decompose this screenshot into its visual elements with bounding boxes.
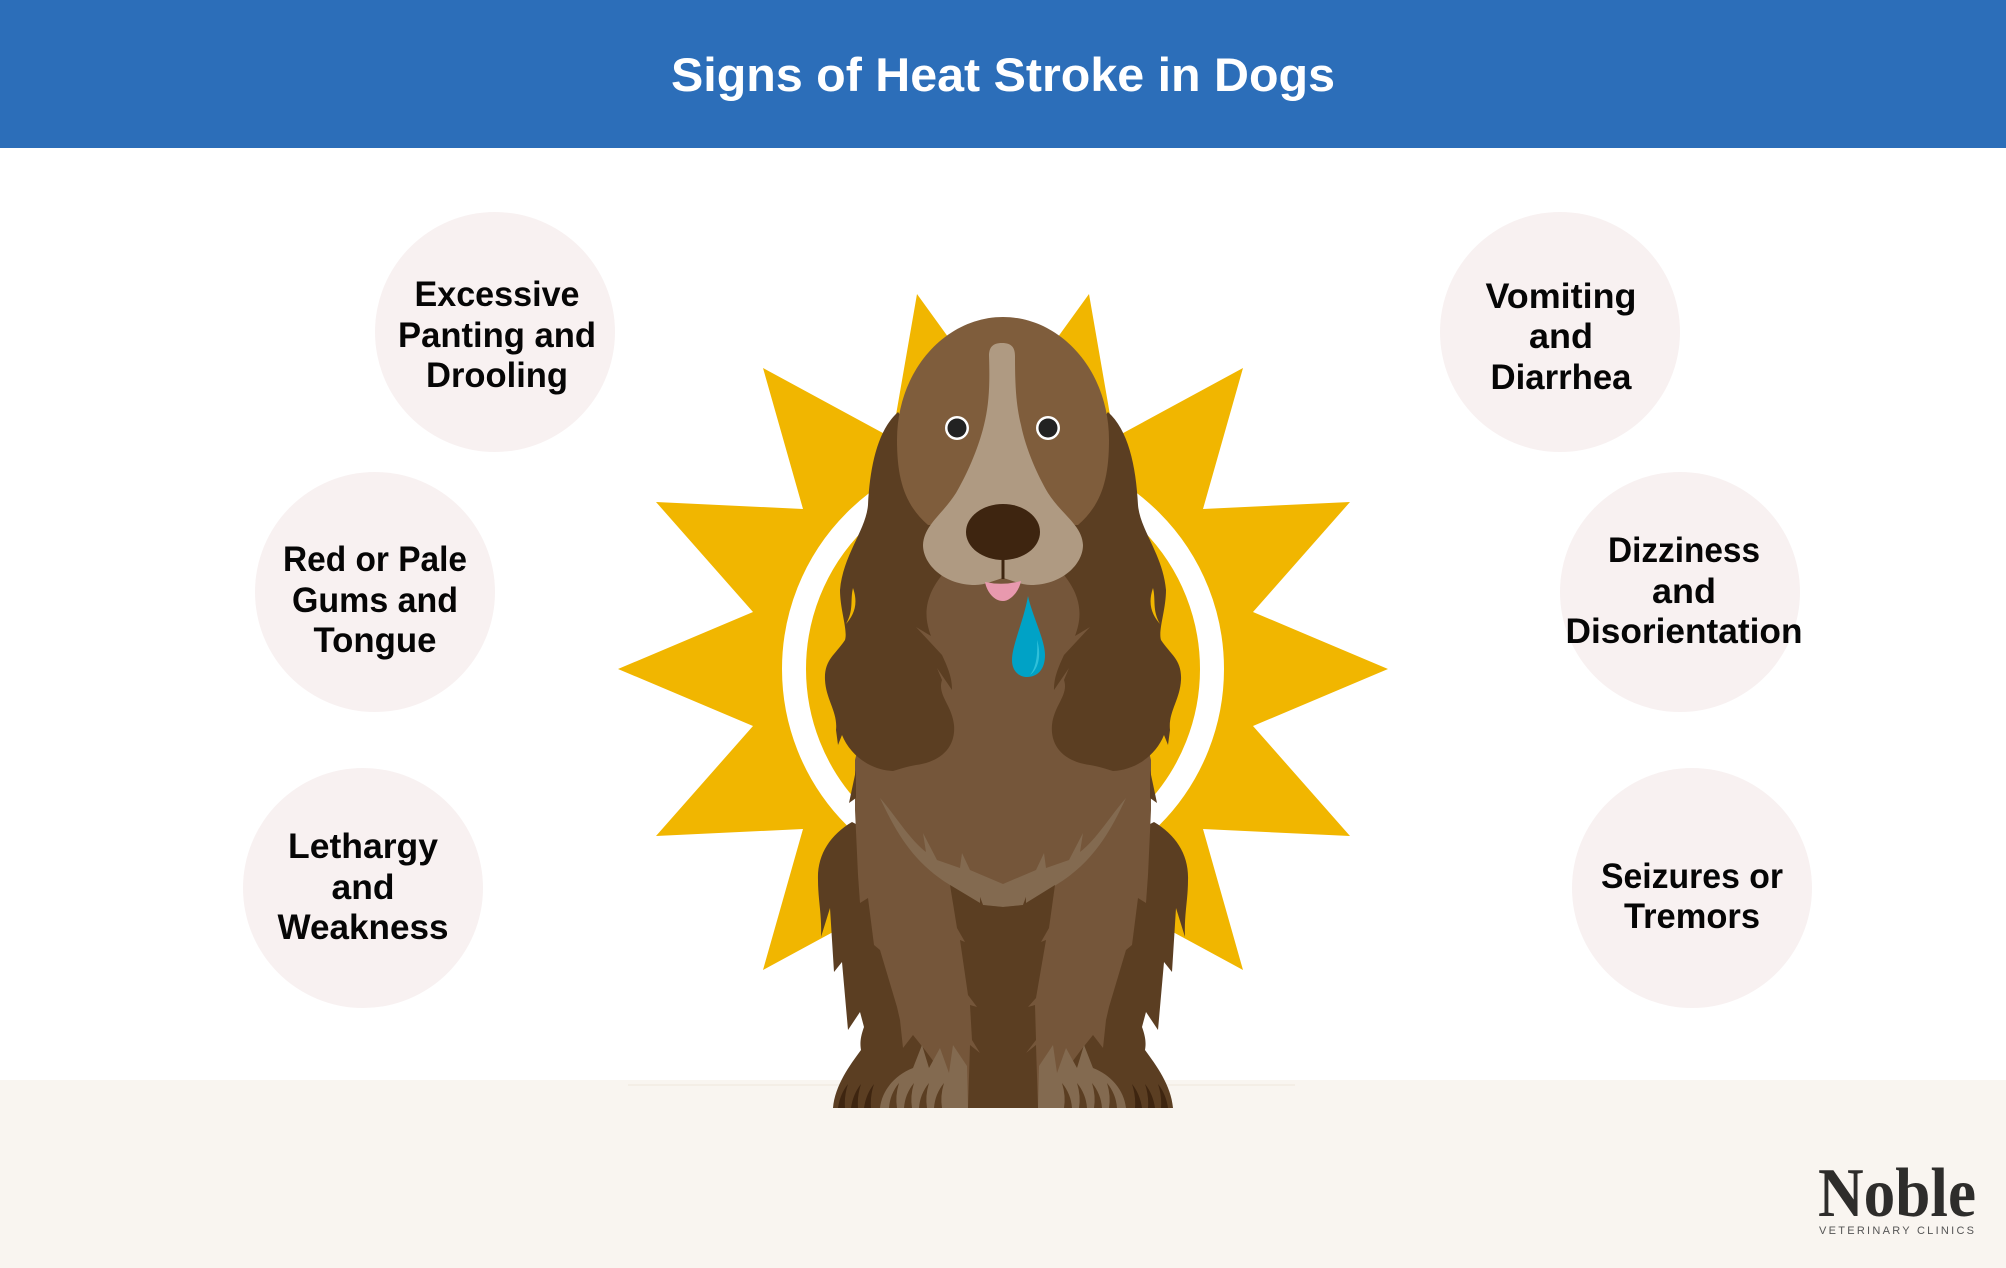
sign: excessive panting and drooling: Drooling	[426, 356, 568, 395]
sign: dizziness and disorientation: Disorientation	[1566, 612, 1802, 651]
sign: lethargy and weakness: and	[332, 868, 394, 907]
muzzle and blaze	[923, 343, 1083, 585]
sign: dizziness and disorientation	[1560, 472, 1802, 712]
sign: seizures or tremors: Seizures or	[1601, 857, 1783, 896]
illustration: dog	[818, 317, 1188, 1108]
tongue	[985, 581, 1021, 601]
sign: vomiting and diarrhea	[1440, 212, 1680, 452]
front paws	[880, 1045, 1126, 1108]
sign: vomiting and diarrhea: Vomiting	[1486, 277, 1636, 316]
sign: excessive panting and drooling: Excessive	[414, 275, 580, 314]
logo: Noble Veterinary Clinics: VETERINARY CLINICS	[1819, 1225, 1974, 1237]
title: Signs of Heat Stroke in Dogs	[671, 48, 1335, 101]
head	[897, 317, 1109, 525]
drool drop	[1012, 596, 1045, 677]
sign: vomiting and diarrhea: Diarrhea	[1490, 358, 1632, 397]
sign: dizziness and disorientation: Dizziness	[1608, 531, 1760, 570]
sign: lethargy and weakness: Lethargy	[288, 827, 439, 866]
sign: excessive panting and drooling	[375, 212, 615, 452]
sign: red or pale gums and tongue: Red or Pale	[283, 540, 467, 579]
sign: red or pale gums and tongue	[255, 472, 495, 712]
eyes	[945, 416, 1060, 440]
sign: excessive panting and drooling: Panting and	[398, 316, 596, 355]
logo: Noble Veterinary Clinics: Noble	[1818, 1155, 1976, 1232]
body and front legs	[855, 540, 1151, 1108]
sign: seizures or tremors	[1572, 768, 1812, 1008]
sign: seizures or tremors: Tremors	[1624, 897, 1760, 936]
sign: red or pale gums and tongue: Tongue	[314, 621, 436, 660]
sign: lethargy and weakness: Weakness	[278, 908, 448, 947]
claws	[838, 1083, 1168, 1108]
nose	[966, 504, 1040, 579]
rear haunches	[818, 822, 1188, 1108]
sign: dizziness and disorientation: and	[1652, 572, 1716, 611]
header banner	[0, 0, 2006, 148]
footer band	[0, 1080, 2006, 1268]
sign: lethargy and weakness	[243, 768, 483, 1008]
sun burst	[618, 294, 1388, 1044]
shoulder fur tufts	[849, 770, 1157, 803]
ears	[825, 412, 1181, 771]
sign: red or pale gums and tongue: Gums and	[292, 581, 458, 620]
dark gap between front legs	[950, 885, 1055, 1108]
chest fur	[880, 798, 1126, 907]
sign: vomiting and diarrhea: and	[1529, 317, 1593, 356]
